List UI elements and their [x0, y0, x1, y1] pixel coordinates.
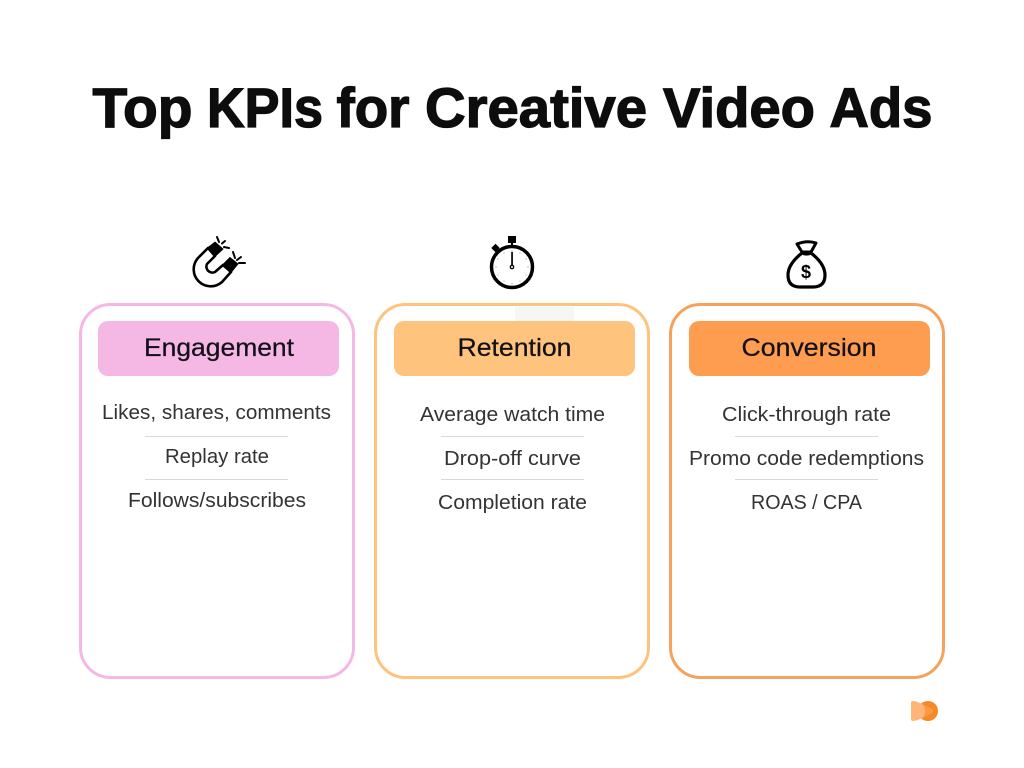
heading: engagement	[98, 321, 339, 376]
list: retention metrics: Completion rate	[438, 492, 587, 514]
icon: brand logo	[911, 701, 938, 721]
list: engagement metrics: Follows/subscribes	[128, 490, 306, 512]
list: conversion metrics: ROAS / CPA	[751, 492, 863, 514]
title: Creative	[425, 76, 647, 139]
heading: conversion	[689, 321, 930, 376]
panel: conversion	[670, 304, 944, 678]
heading: retention: Retention	[458, 334, 572, 362]
list: retention metrics: Drop-off curve	[444, 448, 581, 470]
icon: money bag: $	[801, 262, 811, 282]
panel: engagement	[80, 304, 354, 678]
list: engagement metrics: Replay rate	[165, 446, 269, 468]
list: conversion metrics: Click-through rate	[722, 404, 891, 426]
title: Top	[92, 76, 192, 139]
title	[92, 76, 932, 139]
icon: magnet	[194, 237, 245, 286]
list: engagement metrics	[102, 402, 331, 512]
heading: engagement: Engagement	[144, 334, 294, 362]
panel: retention	[376, 304, 648, 678]
heading: conversion: Conversion	[742, 334, 876, 362]
icon: money bag	[788, 242, 825, 287]
icon: stopwatch	[491, 236, 532, 288]
list: conversion metrics	[689, 404, 924, 514]
list: engagement metrics: Likes, shares, comments	[102, 402, 331, 424]
list: retention metrics: Average watch time	[420, 404, 605, 426]
list: retention metrics	[420, 404, 605, 514]
title: for	[336, 76, 410, 139]
heading: retention	[394, 321, 635, 376]
title: Video	[663, 76, 815, 139]
list: conversion metrics: Promo code redemptions	[689, 448, 924, 470]
title: KPIs	[207, 76, 323, 139]
title: Ads	[830, 76, 932, 139]
